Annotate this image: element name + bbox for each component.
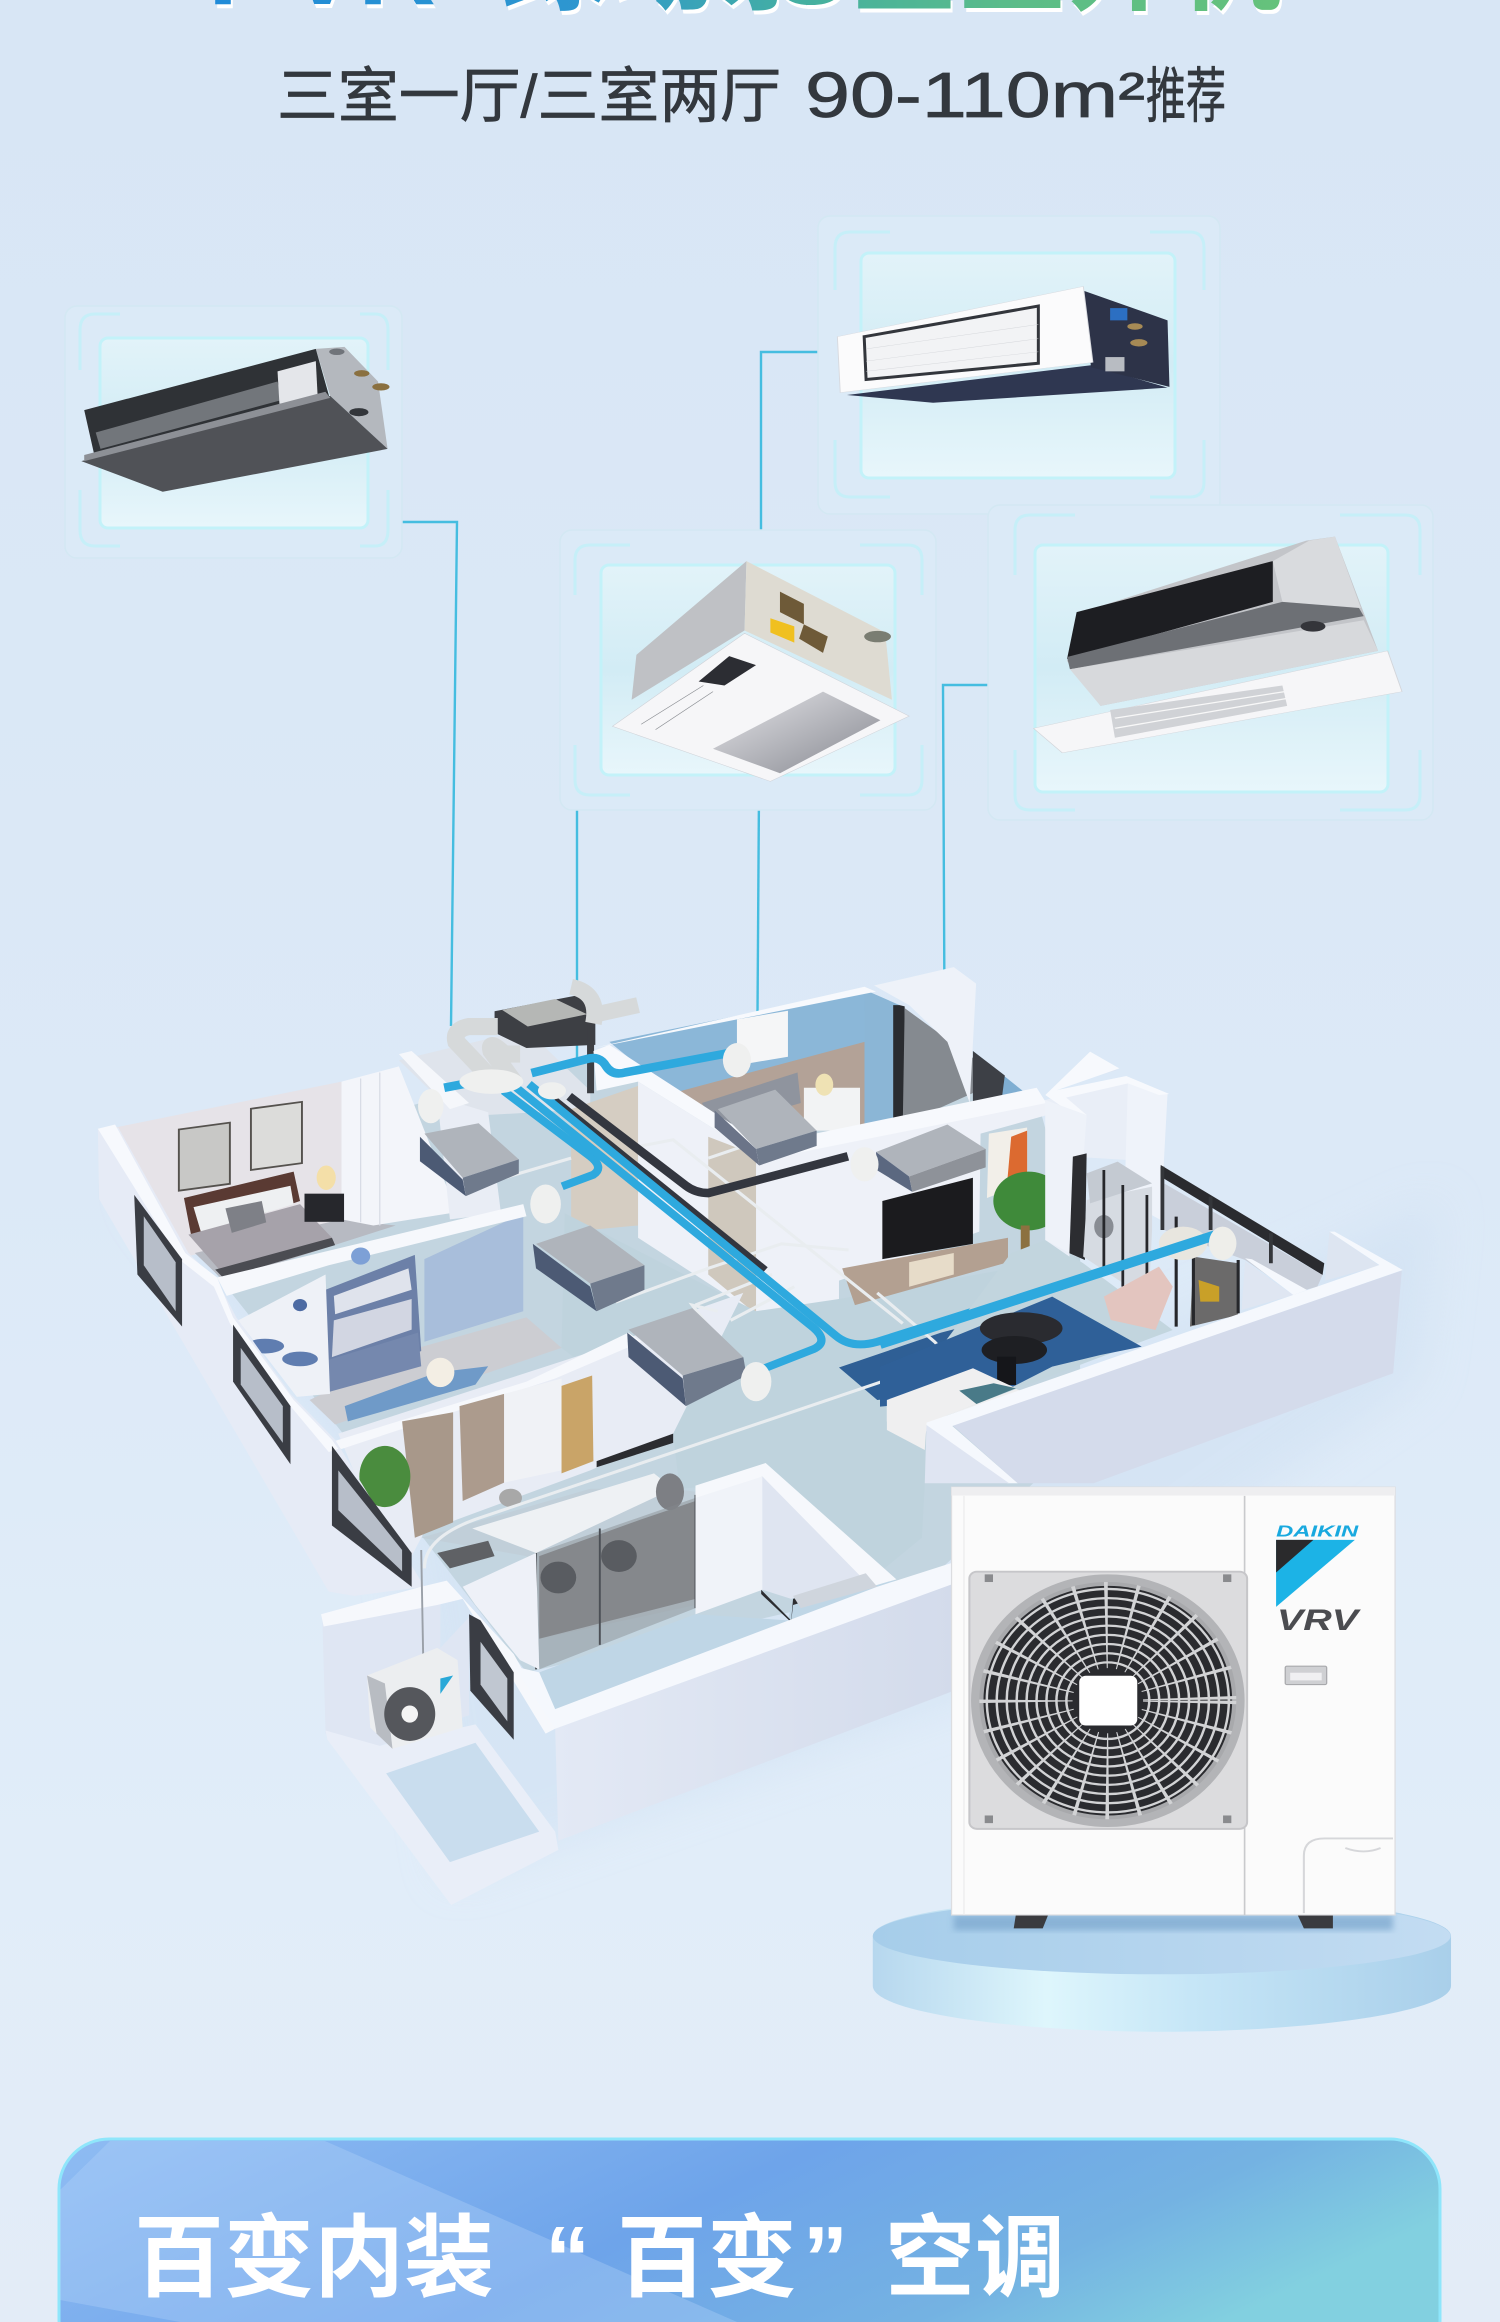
thin refrigerant lines — [424, 1140, 939, 1568]
panel: product frame 1 — [65, 306, 402, 558]
product: ceiling cassette — [612, 561, 909, 781]
room: master bedroom back walls — [593, 967, 1030, 1134]
panel: product frame 4 — [988, 505, 1433, 820]
room: dining wall and cabinets — [329, 1293, 743, 1581]
top rim of the wall — [926, 1232, 1403, 1483]
room: utility / fresh-air box area — [399, 987, 638, 1115]
banner heading: 百变内装 — [134, 2209, 494, 2309]
dark drainage pipes — [555, 1096, 848, 1270]
front wall top rim — [514, 1562, 954, 1729]
sofa — [887, 1372, 1021, 1446]
soft shadow of the house model — [130, 1180, 1440, 1880]
unit feet — [1014, 1915, 1333, 1928]
platform — [873, 1896, 1451, 2032]
utility walls — [1045, 1052, 1169, 1257]
unit body — [952, 1487, 1395, 1915]
front balcony room — [463, 1463, 900, 1715]
floor plate — [144, 1054, 1080, 1672]
mini outdoor unit — [367, 1648, 463, 1749]
artwork pair — [179, 1102, 302, 1191]
room: kids room — [217, 1204, 562, 1424]
product: ducted unit dark — [81, 347, 389, 492]
panel: product frame 3 — [560, 530, 936, 810]
room: dining table and chairs — [421, 1473, 695, 1669]
banner heading: ” — [803, 2209, 848, 2309]
balcony railing — [1161, 1165, 1324, 1293]
service cover — [1304, 1838, 1393, 1913]
connector lines — [402, 352, 1008, 1225]
panel: product frame 2 — [818, 216, 1220, 514]
stub rim — [1245, 1258, 1307, 1295]
banner heading: “ — [545, 2209, 590, 2309]
subtitle: 推荐 — [1146, 63, 1226, 130]
product: white fascia ducted unit — [837, 286, 1169, 403]
balcony and living floor — [926, 1240, 1173, 1423]
subtitle: 三室一厅/三室两厅 — [277, 63, 781, 130]
room: central partition walls and doors — [399, 1045, 1046, 1314]
fan guard — [969, 1572, 1247, 1829]
brand logo: DAIKIN — [1276, 1522, 1359, 1540]
outer corner back wall — [1325, 1232, 1379, 1281]
room: upper-left bedroom — [115, 1066, 450, 1281]
rug — [839, 1296, 1080, 1400]
brand logo — [1276, 1522, 1361, 1637]
left exterior wall with windows — [98, 1124, 424, 1596]
lower-left balcony walls — [321, 1550, 558, 1905]
side shelf and chair — [1104, 1217, 1238, 1330]
outdoor unit on platform — [873, 1487, 1451, 2032]
card: bottom banner — [59, 2139, 1440, 2322]
brand logo: VRV — [1277, 1603, 1361, 1637]
wall end face — [925, 1425, 1009, 1483]
banner heading: 空调 — [885, 2209, 1065, 2309]
product: slim ceiling unit — [1034, 537, 1402, 753]
front wall — [555, 1581, 954, 1841]
table and sofa — [887, 1312, 1063, 1450]
illustration: right-hand living room and corner walls — [880, 1052, 1403, 1483]
plant — [993, 1172, 1063, 1268]
banner heading: 百变 — [617, 2209, 797, 2309]
subtitle — [277, 59, 1226, 131]
fan-coil unit: dining side — [627, 1308, 747, 1406]
wall stub — [1242, 1262, 1293, 1310]
bed — [184, 1165, 344, 1278]
subtitle: 90-110m² — [805, 59, 1145, 131]
blue duct tail — [880, 1227, 1236, 1344]
fan-coil unit: master bedroom — [715, 1090, 817, 1165]
room: living room floor and TV wall — [562, 1128, 1080, 1574]
handle — [1285, 1666, 1327, 1685]
fan-coil unit: living room — [876, 1124, 986, 1192]
blue ducts — [444, 1053, 1080, 1369]
fan-coil unit: kids room — [533, 1225, 644, 1311]
illustration: isometric apartment model — [98, 967, 1080, 1905]
rug — [880, 1297, 1142, 1407]
washing-machine bay — [1069, 1153, 1152, 1300]
duct elbows — [418, 1043, 879, 1401]
big living room wall — [952, 1271, 1402, 1483]
fan-coil unit: left bedroom — [420, 1123, 519, 1196]
